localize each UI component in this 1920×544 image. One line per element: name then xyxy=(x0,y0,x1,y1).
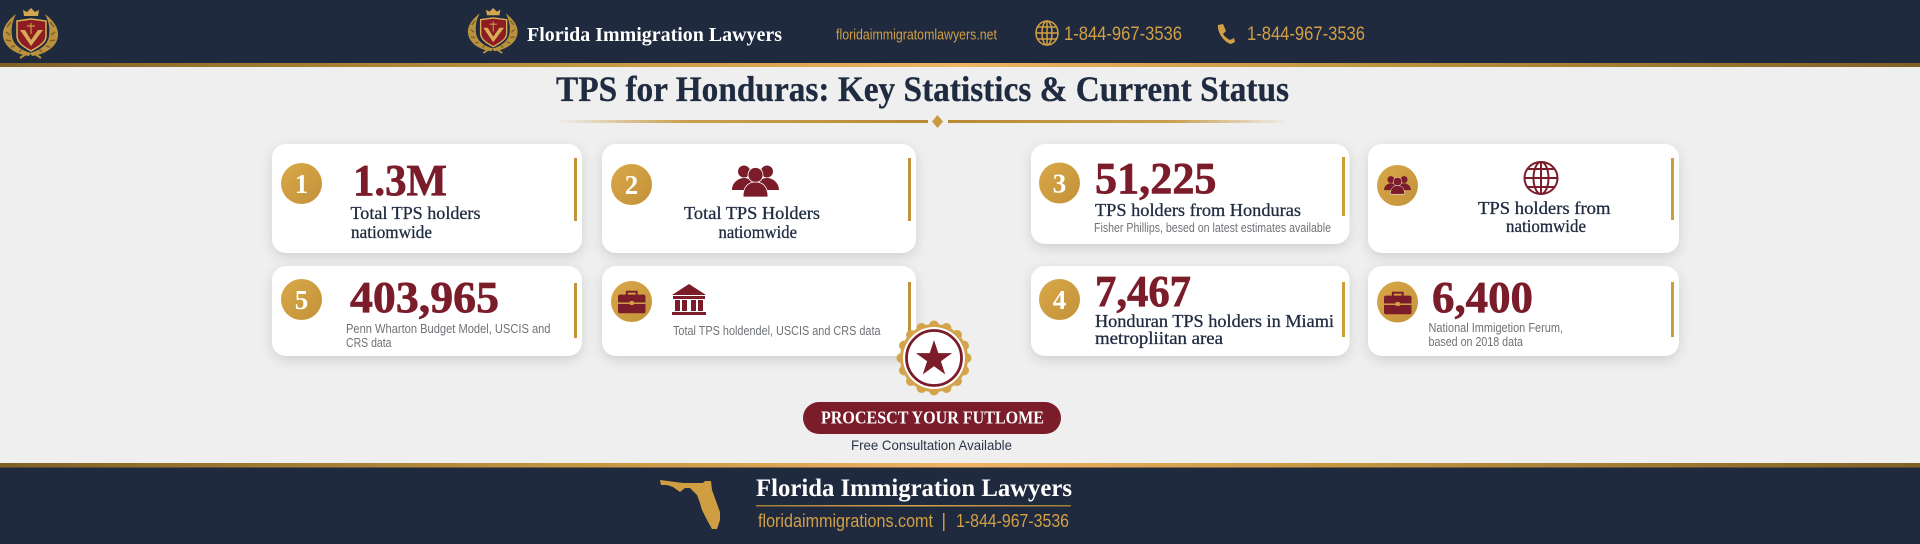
panel: card 4: 7,467 xyxy=(1095,267,1191,316)
footer firm name: Florida Immigration Lawyers xyxy=(756,475,1072,502)
panel: card 3 xyxy=(1031,144,1350,244)
panel: card globe xyxy=(1368,144,1679,253)
icon: globe xyxy=(1524,162,1558,194)
panel: card 5: 403,965 xyxy=(350,273,499,322)
panel: card 6,400: National Immigetion Ferum, xyxy=(1428,321,1563,335)
call-to-action pill xyxy=(803,402,1061,434)
panel: card 1: 1 xyxy=(295,169,308,199)
footer website: floridaimmigrations.comt xyxy=(758,511,933,531)
panel: card 2: natiomwide xyxy=(718,222,797,242)
icon: briefcase xyxy=(618,292,646,313)
panel: card 1: 1.3M xyxy=(353,156,447,205)
title: TPS for Honduras: Key Statistics & Current Status xyxy=(556,69,1289,109)
panel: card 5: CRS data xyxy=(346,336,392,350)
call-to-action pill: PROCESCT YOUR FUTLOME xyxy=(821,408,1044,428)
icon: people xyxy=(732,166,779,197)
icon: left crest xyxy=(3,8,58,58)
panel: card 3: Fisher Phillips, besed on latest estimates available xyxy=(1094,221,1331,235)
panel: card 5 xyxy=(272,266,582,356)
panel: card 2: Total TPS Holders xyxy=(684,203,820,223)
panel: card 3: TPS holders from Honduras xyxy=(1095,200,1301,220)
panel: card globe: natiomwide xyxy=(1506,216,1586,236)
panel: card 3: 3 xyxy=(1053,168,1066,198)
consultation note: Free Consultation Available xyxy=(851,437,1012,453)
header bar xyxy=(0,0,1920,67)
icon: header globe xyxy=(1036,21,1058,45)
header firm name: Florida Immigration Lawyers xyxy=(527,24,782,46)
panel: card 6,400: 6,400 xyxy=(1432,273,1533,322)
icon: center crest xyxy=(468,8,518,53)
icon: header phone xyxy=(1218,24,1235,44)
panel: card 1: natiomwide xyxy=(351,222,432,242)
panel: card 1 xyxy=(272,144,582,253)
panel: card 4 xyxy=(1031,266,1350,356)
icon: star badge xyxy=(896,320,972,396)
panel: card 6 xyxy=(602,266,916,356)
panel: card 6,400 xyxy=(1368,266,1679,356)
panel: card 2: 2 xyxy=(625,170,638,200)
title divider xyxy=(556,115,1289,128)
panel: card 4: metropliitan area xyxy=(1095,328,1223,348)
panel: card globe: TPS holders from xyxy=(1478,198,1610,218)
panel: card 4: Honduran TPS holders in Miami xyxy=(1095,311,1334,331)
header website: floridaimmigratomlawyers.net xyxy=(836,26,998,44)
icon: bank xyxy=(672,284,706,315)
panel: card 6: Total TPS holdendel, USCIS and CRS data xyxy=(673,324,881,338)
header phone one: 1-844-967-3536 xyxy=(1064,24,1182,45)
panel: card 2 xyxy=(602,144,916,253)
icon: Florida map xyxy=(660,480,720,529)
panel: card 1: Total TPS holders xyxy=(350,203,480,223)
panel: card 6,400: based on 2018 data xyxy=(1428,335,1523,349)
panel: card 4: 4 xyxy=(1053,285,1066,315)
footer phone: 1-844-967-3536 xyxy=(956,511,1069,531)
icon: briefcase xyxy=(1384,293,1412,314)
header phone two: 1-844-967-3536 xyxy=(1247,24,1365,45)
panel: card 5: Penn Wharton Budget Model, USCIS and xyxy=(346,322,551,336)
icon: people small xyxy=(1384,176,1411,194)
panel: card 5: 5 xyxy=(295,285,308,315)
panel: card 3: 51,225 xyxy=(1095,154,1216,203)
footer bar xyxy=(0,463,1920,544)
